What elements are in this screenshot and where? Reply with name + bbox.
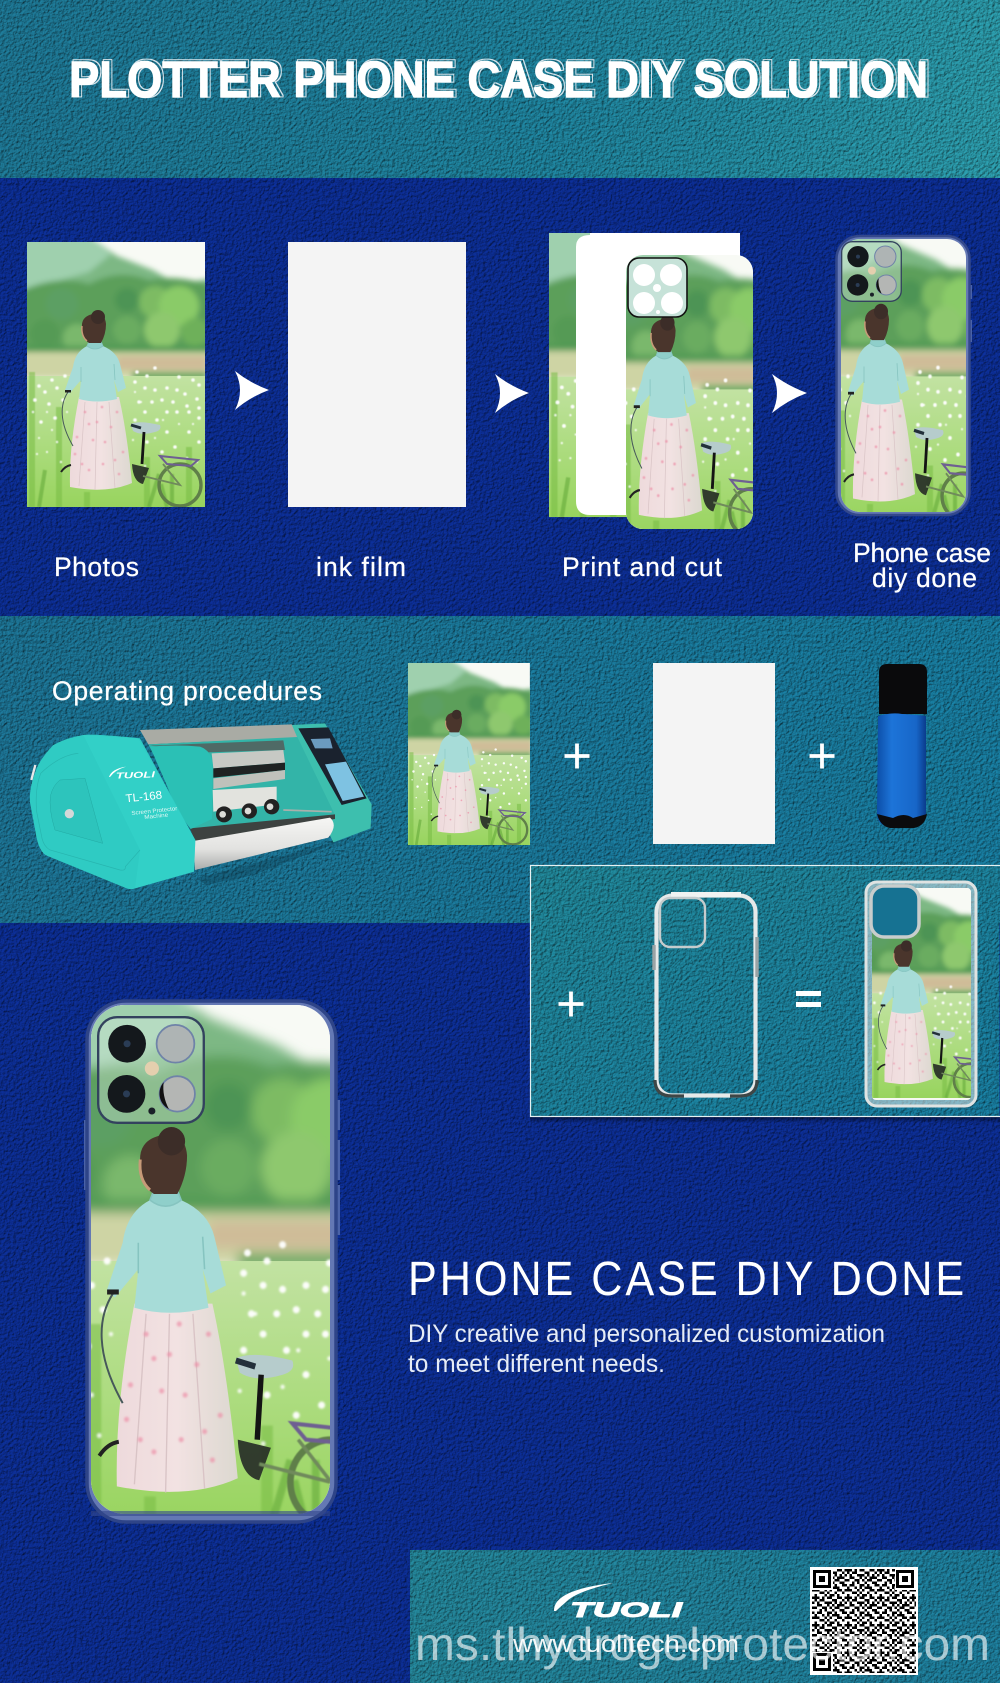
background: navy process section <box>0 178 1000 616</box>
machine model text: TL-168 <box>125 790 163 805</box>
watermark: ms.tlhydrogelprotector.com <box>415 1618 990 1670</box>
label: ink film: ink film <box>316 552 406 582</box>
camera module <box>98 1017 204 1123</box>
large finished phone <box>84 999 340 1524</box>
label: Print and cut: Print and cut <box>562 552 723 582</box>
background: navy lower section <box>0 923 1000 1683</box>
background: top teal header band <box>0 0 1000 178</box>
background: teal operating procedures band <box>0 616 1000 923</box>
logo: TUOLI <box>554 1583 684 1622</box>
label: Photos: Photos <box>54 552 139 582</box>
machine logo text: TUOLI <box>116 769 156 781</box>
text block: description <box>408 1320 885 1378</box>
website URL: www.tuolitech.com <box>512 1631 739 1658</box>
plus sign 3 <box>558 992 584 1016</box>
equals sign <box>796 991 821 1007</box>
machine description: Machine <box>144 813 169 821</box>
small photo <box>403 658 535 845</box>
heading: PHONE CASE DIY DONE: PHONE CASE DIY DONE <box>408 1252 964 1306</box>
QR code <box>810 1567 918 1675</box>
machine description: Screen Protector <box>131 806 178 817</box>
machine description <box>131 806 178 822</box>
text block: description: to meet different needs. <box>408 1350 665 1378</box>
step 4: finished phone <box>835 234 972 516</box>
finished case with photo <box>864 880 978 1108</box>
step 3: printed and cut film <box>549 233 753 529</box>
transparent phone case <box>654 894 757 1096</box>
small ink film sheet <box>653 663 775 844</box>
panel: process steps <box>19 220 996 593</box>
arrow 2 <box>495 374 529 413</box>
plus sign 2 <box>810 744 834 768</box>
step 2: ink film sheet <box>288 242 466 507</box>
label: Phone case diy done: diy done <box>872 563 977 593</box>
logo: TUOLI: TUOLI <box>570 1599 684 1622</box>
arrow 3 <box>772 374 807 413</box>
step 1: photo <box>19 234 213 507</box>
machine: TL-168 screen protector plotter <box>30 723 372 889</box>
label: Phone case diy done <box>853 538 991 593</box>
heading: Operating procedures: Operating procedures <box>52 676 322 706</box>
text block: description: DIY creative and personalized customization <box>408 1320 885 1348</box>
panel: case combination result <box>530 866 1000 1123</box>
panel: footer <box>410 1550 1000 1683</box>
arrow 1 <box>235 371 269 410</box>
machine swoosh <box>109 767 126 777</box>
plus sign 1 <box>564 744 590 768</box>
label: Phone case diy done: Phone case <box>853 538 991 568</box>
icon: USB drive <box>877 664 927 828</box>
